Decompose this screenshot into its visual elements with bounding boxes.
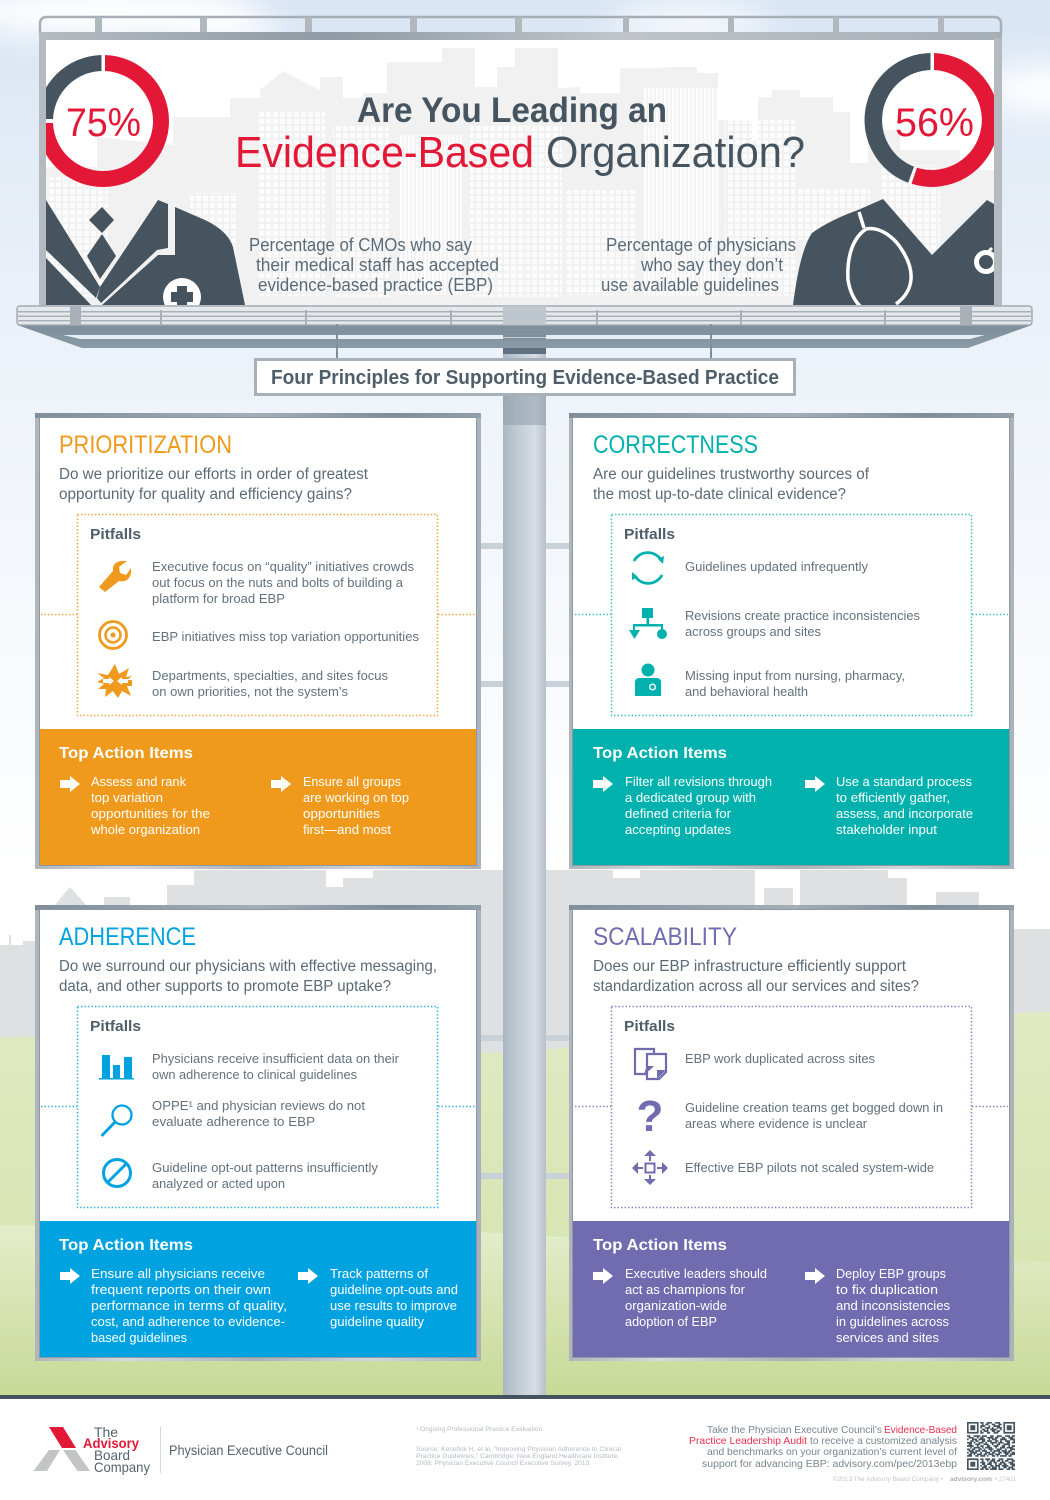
- title: Evidence-Based: [235, 128, 534, 177]
- pitfall text: [685, 608, 920, 639]
- stat caption: CMOs: their medical staff has accepted: [256, 255, 499, 275]
- pitfalls heading: Pitfalls: [90, 526, 141, 543]
- banner: four principles heading: [256, 360, 794, 394]
- footnotes and source: Practice Guidelines,” Cambridge: New England Healthcare Institute,: [416, 1454, 619, 1460]
- icon: bar chart: [99, 1055, 134, 1080]
- action item: based guidelines: [91, 1330, 187, 1345]
- action item: act as champions for: [625, 1282, 746, 1297]
- donut chart: 75% of CMOs: [37, 55, 169, 187]
- action item: use results to improve: [330, 1298, 457, 1313]
- banner hangers: [336, 324, 712, 359]
- pitfall text: [685, 668, 905, 699]
- pitfall text: across groups and sites: [685, 624, 821, 639]
- icon: scrubs with stethoscope: [793, 199, 996, 306]
- footnotes and source: [416, 1427, 621, 1467]
- title: [235, 91, 805, 177]
- stat caption: CMOs: evidence-based practice (EBP): [258, 275, 493, 295]
- call to action: to receive a customized analysis: [810, 1436, 957, 1447]
- arrow icon: [805, 776, 825, 792]
- call to action: and benchmarks on your organization’s current level of: [707, 1447, 957, 1458]
- copyright line: ©2013 The Advisory Board Company •: [833, 1475, 944, 1483]
- icon: flow chart: [629, 608, 667, 639]
- action item: and inconsistencies: [836, 1298, 950, 1313]
- pitfall text: [685, 1100, 943, 1131]
- title: Are You Leading an: [357, 91, 667, 130]
- action item: in guidelines across: [836, 1314, 949, 1329]
- pitfall text: EBP work duplicated across sites: [685, 1051, 875, 1066]
- action item: defined criteria for: [625, 806, 732, 821]
- question: opportunity for quality and efficiency gains?: [59, 486, 352, 503]
- icon: magnifier: [102, 1106, 132, 1135]
- action item: organization-wide: [625, 1298, 727, 1313]
- pitfall text: areas where evidence is unclear: [685, 1116, 868, 1131]
- footer logo: The Advisory Board Company: Advisory: [83, 1435, 139, 1451]
- pitfall text: EBP initiatives miss top variation opportunities: [152, 629, 419, 644]
- pitfall text: analyzed or acted upon: [152, 1176, 285, 1191]
- pitfalls heading: Pitfalls: [90, 1018, 141, 1035]
- action item: [625, 1266, 767, 1329]
- panel: adherence: [35, 905, 481, 1361]
- heading: SCALABILITY: [593, 923, 737, 951]
- banner: four principles heading: Four Principles for Supporting Evidence-Based Practice: [271, 367, 779, 389]
- question: [59, 466, 369, 503]
- pitfall text: [152, 1098, 365, 1129]
- action item: to fix duplication: [836, 1282, 938, 1297]
- action item: Deploy EBP groups: [836, 1266, 946, 1281]
- question: Do we surround our physicians with effective messaging,: [59, 958, 437, 975]
- copyright line: • 27401: [995, 1476, 1016, 1483]
- action band: [573, 1221, 1009, 1357]
- action item: whole organization: [90, 822, 200, 837]
- donut chart: 56% of physicians: [865, 53, 999, 187]
- billboard frame: [39, 38, 1002, 308]
- question: [593, 466, 870, 503]
- call to action: [689, 1425, 957, 1470]
- action item: [836, 1266, 950, 1345]
- footer logo: The Advisory Board Company: Board: [94, 1447, 130, 1463]
- pitfalls box: [41, 514, 475, 716]
- action item: first—and most: [303, 822, 391, 837]
- pitfall text: and behavioral health: [685, 684, 808, 699]
- action item: [91, 1266, 287, 1345]
- arrow icon: [60, 776, 80, 792]
- action item: [303, 774, 409, 837]
- icon: expand arrows: [632, 1150, 668, 1185]
- action item: [330, 1266, 458, 1329]
- pitfall text: Revisions create practice inconsistencies: [685, 608, 920, 623]
- action item: a dedicated group with: [625, 790, 756, 805]
- support pole: [503, 310, 546, 1395]
- action item: are working on top: [303, 790, 409, 805]
- pitfall text: on own priorities, not the system’s: [152, 684, 348, 699]
- question: Are our guidelines trustworthy sources of: [593, 466, 870, 483]
- action item: top variation: [91, 790, 163, 805]
- call to action: Practice Leadership Audit: [689, 1436, 807, 1447]
- 75% value: 75%: [66, 101, 141, 145]
- arrow icon: [60, 1268, 80, 1284]
- pitfall text: [152, 1160, 379, 1191]
- question: the most up-to-date clinical evidence?: [593, 486, 846, 503]
- stat caption: CMOs: Percentage of CMOs who say: [249, 235, 472, 255]
- action heading: Top Action Items: [593, 745, 727, 762]
- heading: PRIORITIZATION: [59, 431, 232, 459]
- pitfalls heading: Pitfalls: [624, 1018, 675, 1035]
- question: data, and other supports to promote EBP uptake?: [59, 978, 391, 995]
- stat caption: CMOs: [249, 235, 499, 295]
- stat caption: physicians: who say they don’t: [640, 255, 783, 275]
- icon: duplicate documents: [635, 1049, 666, 1079]
- arrow icon: [271, 776, 291, 792]
- pitfall text: Missing input from nursing, pharmacy,: [685, 668, 905, 683]
- billboard platform: [17, 306, 1032, 348]
- call to action: Take the Physician Executive Council’s: [707, 1425, 882, 1436]
- arrow icon: [805, 1268, 825, 1284]
- icon: target: [100, 622, 126, 648]
- background: upper grass hill: [0, 1012, 1050, 1396]
- action item: to efficiently gather,: [836, 790, 950, 805]
- action item: Ensure all physicians receive: [91, 1266, 265, 1281]
- action item: [625, 774, 772, 837]
- footnotes and source: 2008; Physician Executive Council Executive Survey, 2013.: [416, 1461, 591, 1467]
- arrow icon: [593, 1268, 613, 1284]
- question: [593, 958, 919, 995]
- pitfall text: own adherence to clinical guidelines: [152, 1067, 357, 1082]
- pitfalls box: [575, 1006, 1008, 1208]
- 56% value: 56%: [895, 101, 974, 145]
- action item: [836, 774, 973, 837]
- cross braces between panels and pole: [481, 543, 569, 1179]
- action item: accepting updates: [625, 822, 731, 837]
- icon: question mark: ?: [637, 1092, 663, 1141]
- stat caption: physicians: [601, 235, 796, 295]
- billboard skyline: [46, 48, 994, 305]
- action heading: Top Action Items: [59, 745, 193, 762]
- footer logo: The Advisory Board Company: [34, 1424, 161, 1475]
- pitfall text: OPPE¹ and physician reviews do not: [152, 1098, 365, 1113]
- icon: clinician: [635, 664, 661, 696]
- footer logo: The Advisory Board Company: Company: [94, 1459, 150, 1475]
- action item: guideline opt-outs and: [330, 1282, 458, 1297]
- question: Does our EBP infrastructure efficiently support: [593, 958, 907, 975]
- pitfall text: Guidelines updated infrequently: [685, 559, 869, 574]
- pitfall text: [152, 1051, 400, 1082]
- action item: stakeholder input: [836, 822, 937, 837]
- icon: colliding arrows burst: [97, 664, 132, 698]
- call to action: support for advancing EBP: advisory.com/pec/2013ebp: [702, 1459, 957, 1470]
- footnotes and source: ¹ Ongoing Professional Practice Evaluation.: [416, 1427, 544, 1433]
- background: lower grass hill: [0, 1225, 1050, 1396]
- heading: ADHERENCE: [59, 923, 196, 951]
- pitfalls box: [41, 1006, 475, 1208]
- copyright line: advisory.com: [950, 1476, 992, 1483]
- action item: opportunities for the: [91, 806, 210, 821]
- pitfall text: Executive focus on “quality” initiatives crowds: [152, 559, 414, 574]
- pitfall text: evaluate adherence to EBP: [152, 1114, 315, 1129]
- action item: frequent reports on their own: [91, 1282, 271, 1297]
- action band: [40, 1221, 476, 1357]
- action item: services and sites: [836, 1330, 939, 1345]
- title: Organization?: [546, 128, 805, 177]
- pitfalls box: [575, 514, 1008, 716]
- icon: prohibited sign: [104, 1160, 130, 1186]
- footer logo: The Advisory Board Company: The: [94, 1424, 118, 1440]
- copyright line: [833, 1475, 1016, 1483]
- call to action: Evidence-Based: [884, 1425, 957, 1436]
- panel: prioritization: [35, 413, 481, 869]
- panel: correctness: [569, 413, 1014, 869]
- pitfall text: Effective EBP pilots not scaled system-wide: [685, 1160, 934, 1175]
- icon: suit with tie and medical badge: [46, 200, 245, 316]
- stat caption: physicians: Percentage of physicians: [606, 235, 796, 255]
- question: [59, 958, 437, 995]
- pitfall text: platform for broad EBP: [152, 591, 285, 606]
- pitfall text: out focus on the nuts and bolts of building a: [152, 575, 404, 590]
- billboard top rail: [39, 17, 1002, 40]
- panel: scalability: [569, 905, 1014, 1361]
- QR code: [967, 1422, 1015, 1470]
- action item: guideline quality: [330, 1314, 425, 1329]
- arrow icon: [593, 776, 613, 792]
- footnotes and source: Source: Kenefick H, et al, “Improving Physician Adherence to Clinical: [416, 1447, 621, 1453]
- action item: performance in terms of quality,: [91, 1298, 287, 1313]
- footer band: [0, 1395, 1050, 1399]
- action item: adoption of EBP: [625, 1314, 717, 1329]
- question: Do we prioritize our efforts in order of greatest: [59, 466, 369, 483]
- pitfall text: Guideline opt-out patterns insufficiently: [152, 1160, 379, 1175]
- icon: refresh arrows: [632, 553, 664, 583]
- pitfall text: Guideline creation teams get bogged down in: [685, 1100, 943, 1115]
- pitfall text: [152, 668, 388, 699]
- action item: Use a standard process: [836, 774, 972, 789]
- action band: [573, 729, 1009, 865]
- action band: [40, 729, 476, 865]
- footer council name: Physician Executive Council: [169, 1443, 328, 1458]
- action item: cost, and adherence to evidence-: [91, 1314, 285, 1329]
- background: city skyline: [0, 870, 1050, 1100]
- arrow icon: [298, 1268, 318, 1284]
- icon: wrench: [99, 561, 131, 592]
- action item: Ensure all groups: [303, 774, 401, 789]
- action item: Assess and rank: [91, 774, 187, 789]
- pitfall text: Physicians receive insufficient data on their: [152, 1051, 400, 1066]
- action item: [90, 774, 210, 837]
- action item: Executive leaders should: [625, 1266, 767, 1281]
- pitfalls heading: Pitfalls: [624, 526, 675, 543]
- pitfall text: [152, 559, 414, 606]
- pitfall text: Departments, specialties, and sites focus: [152, 668, 388, 683]
- stat caption: physicians: use available guidelines: [601, 275, 779, 295]
- action item: opportunities: [303, 806, 380, 821]
- action heading: Top Action Items: [593, 1237, 727, 1254]
- action item: assess, and incorporate: [836, 806, 973, 821]
- heading: CORRECTNESS: [593, 431, 758, 459]
- action item: Track patterns of: [330, 1266, 428, 1281]
- action heading: Top Action Items: [59, 1237, 193, 1254]
- question: standardization across all our services and sites?: [593, 978, 919, 995]
- action item: Filter all revisions through: [625, 774, 772, 789]
